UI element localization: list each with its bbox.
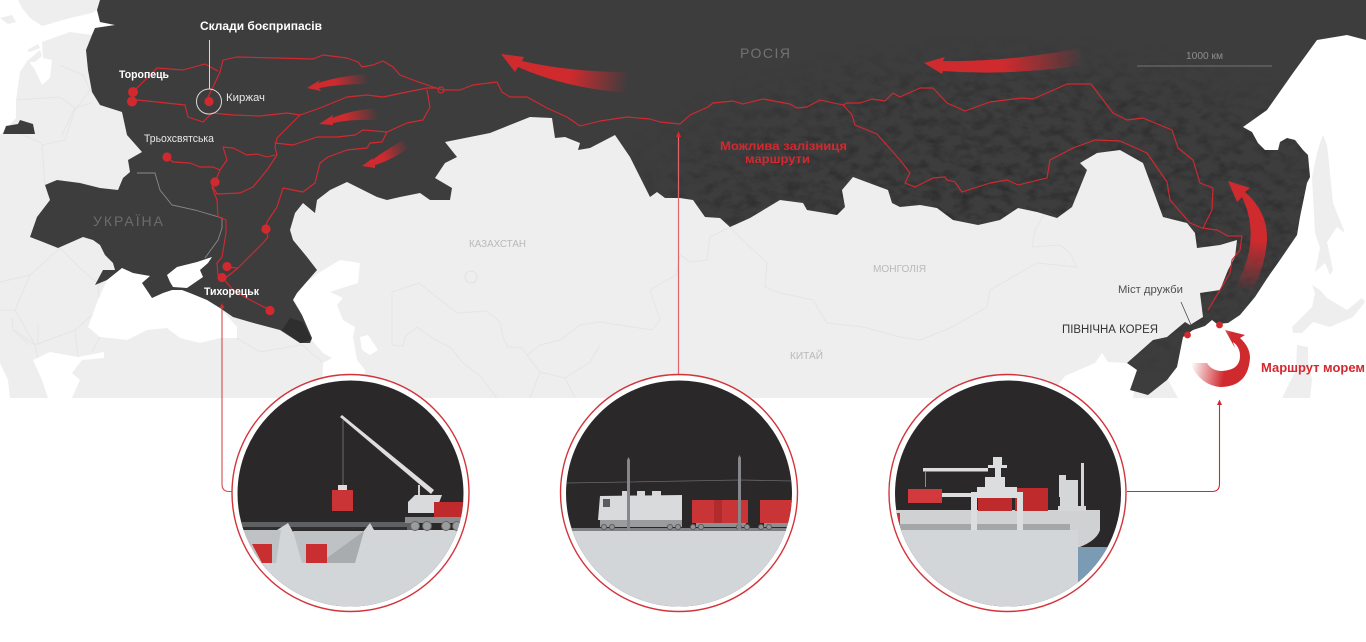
port crane — [923, 457, 1023, 530]
scene 1 artwork — [237, 380, 470, 610]
arrow: sea route — [1190, 330, 1250, 387]
catenary poles — [627, 455, 741, 531]
crane chassis — [405, 517, 465, 523]
arrow: flow 5 — [924, 48, 1083, 74]
baltic sea — [0, 0, 115, 135]
track — [237, 522, 417, 530]
panel: map — [0, 0, 1366, 400]
red containers in pits — [252, 544, 327, 563]
red wagon — [434, 502, 464, 517]
arrow: flow 2 — [319, 108, 377, 125]
country borders — [0, 65, 1177, 398]
aegean sea — [0, 352, 104, 398]
markers: cities and terminals — [127, 87, 1223, 338]
label: Mongolia: МОНГОЛІЯ — [873, 264, 926, 275]
red piece left — [895, 513, 900, 525]
arrow: flow 1 — [307, 74, 367, 91]
scene 3 ring — [889, 374, 1126, 612]
black sea — [88, 268, 237, 343]
honshu — [1282, 345, 1312, 398]
caspian sea — [294, 260, 366, 377]
wheels — [410, 522, 462, 530]
cargo — [978, 488, 1048, 511]
label: Tikhoretsk: Тихорецьк — [204, 286, 259, 298]
label: Kirzhach: Киржач — [226, 92, 265, 104]
arrow: flow 4 — [501, 54, 627, 93]
label: Russia: РОСІЯ — [740, 45, 790, 61]
scene 3: ship at port — [889, 374, 1126, 612]
terrain relief — [282, 82, 1304, 343]
label: Kazakhstan: КАЗАХСТАН — [469, 239, 526, 250]
label: North Korea: ПІВНІЧНА КОРЕЯ — [1062, 324, 1158, 336]
label: China: КИТАЙ — [790, 349, 823, 362]
connector: railway to scene 2 — [676, 131, 681, 375]
catenary wire — [566, 480, 794, 483]
connector: rail terminal to scene 1 — [220, 303, 233, 492]
routes: railway lines — [132, 55, 1242, 310]
scene 2 artwork — [566, 380, 794, 609]
ukraine border — [137, 173, 222, 258]
label: possible rail routes: маршрути — [745, 152, 810, 166]
crane cable — [342, 420, 344, 486]
track — [566, 528, 794, 531]
label: friendship bridge: Міст дружби — [1118, 284, 1183, 296]
label: Tryokhsvyatska: Трьохсвятська — [144, 133, 215, 145]
crane cable — [925, 471, 926, 487]
scene 2 ring — [560, 374, 798, 612]
ground — [566, 531, 794, 609]
scene 1 ring — [232, 374, 469, 612]
label: scale: 1000 км — [1186, 51, 1223, 62]
crane boom — [340, 415, 434, 494]
quay — [890, 530, 1078, 610]
crane cab — [408, 495, 442, 513]
yellow sea — [1058, 354, 1137, 398]
ground — [244, 523, 458, 606]
baltic islands — [0, 15, 42, 62]
scene 2: train — [560, 374, 798, 612]
pits — [237, 530, 364, 563]
label: Ukraine: УКРАЇНА — [93, 213, 164, 229]
scene 1: unloading at terminal — [232, 374, 470, 612]
label: possible rail routes: Можлива залізниця — [720, 139, 847, 153]
land base — [0, 0, 1366, 398]
crane mast — [418, 485, 420, 496]
lake circle — [465, 271, 477, 283]
red wagon 1 — [690, 500, 750, 530]
scale bar — [1137, 66, 1272, 67]
sea of azov — [167, 257, 212, 288]
scene 3 artwork — [890, 380, 1124, 610]
hanging container — [908, 489, 942, 503]
kaliningrad — [3, 120, 35, 134]
ship hull — [895, 510, 1100, 547]
aral sea — [360, 335, 378, 355]
callout: ammunition depot — [196, 40, 222, 114]
hokkaido — [1292, 285, 1365, 333]
hook — [338, 485, 347, 490]
red wagon 2 — [758, 500, 794, 530]
label: ammunition depots: Склади боєприпасів — [200, 19, 322, 33]
hanging container — [332, 490, 353, 511]
dark territory: russia, ukraine, north korea — [30, 0, 1366, 395]
arrow: flow 6 — [1228, 181, 1267, 290]
label: sea route: Маршрут морем — [1261, 360, 1365, 375]
arrow: flow 3 — [362, 140, 408, 168]
ship superstructure — [1058, 463, 1086, 511]
locomotive — [598, 491, 682, 530]
sea of japan — [1168, 35, 1366, 398]
connector: scene 3 to sea route — [1127, 400, 1222, 492]
leader: friendship bridge — [1181, 302, 1191, 325]
sakhalin — [1312, 135, 1345, 275]
water — [1078, 547, 1124, 609]
label: Toropets: Торопець — [119, 69, 169, 81]
